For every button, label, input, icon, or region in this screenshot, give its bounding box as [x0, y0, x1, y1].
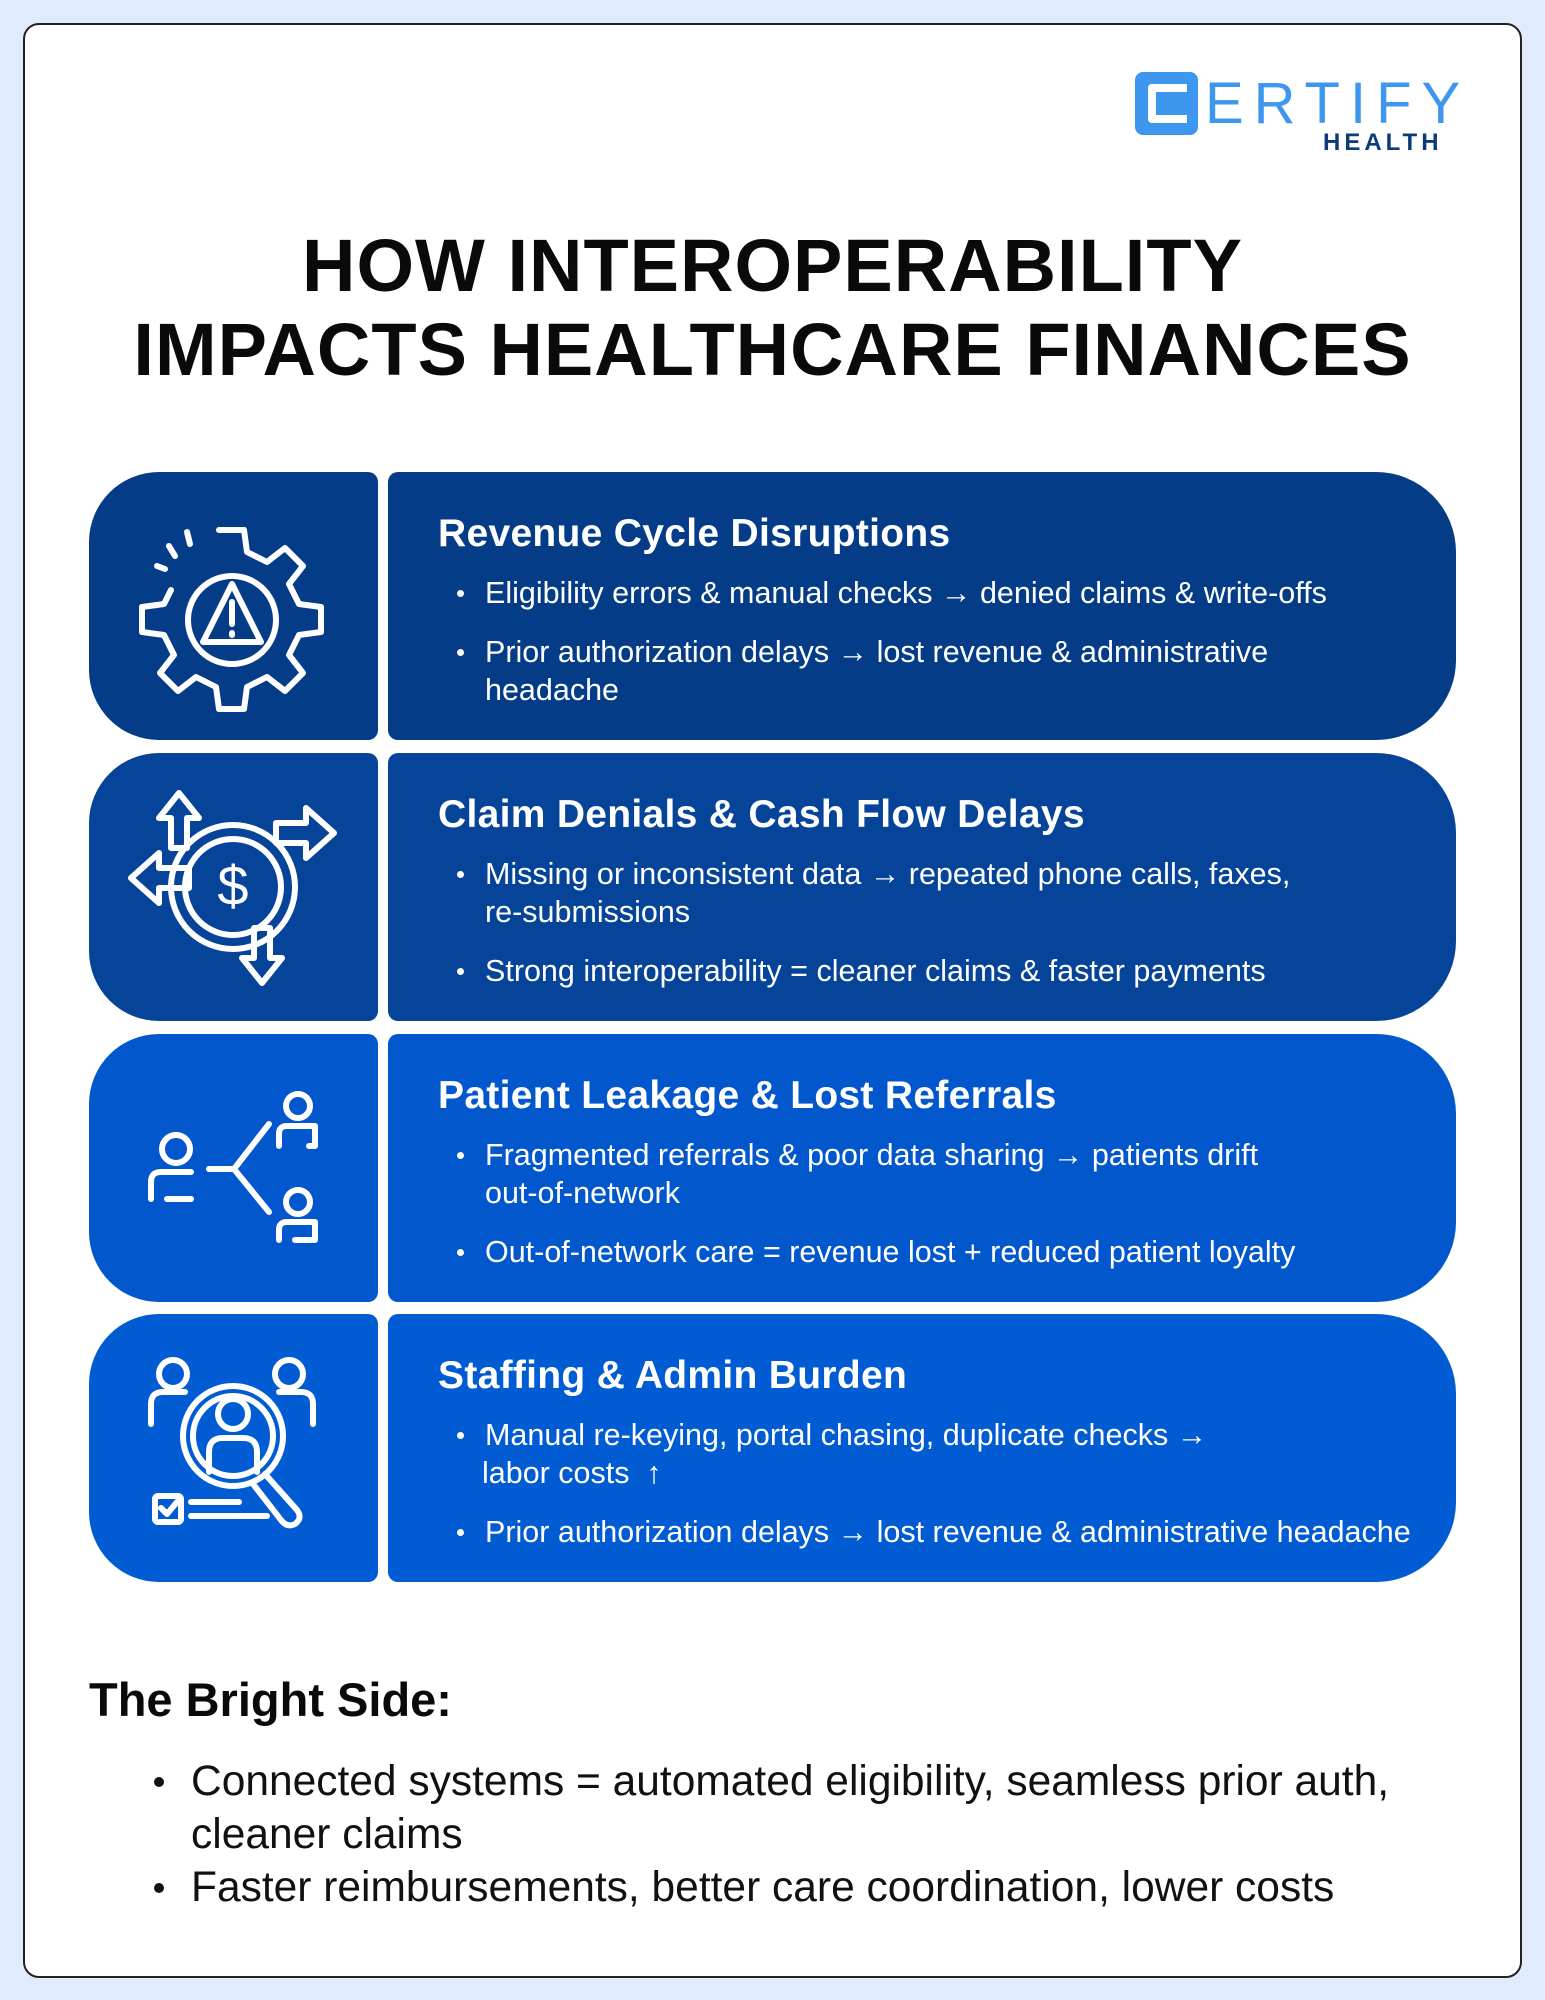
bright side bullets: cleaner claims: [191, 1811, 463, 1858]
row 1 text: Prior authorization delays → lost revenue & administrative: [485, 635, 1268, 669]
row 1 icon: gear warning: [89, 472, 378, 740]
bright side bullets: [154, 1758, 1389, 1911]
row 4 text: labor costs ↑: [482, 1456, 662, 1490]
logo: [1135, 71, 1470, 156]
row 2 text: Strong interoperability = cleaner claims & faster payments: [485, 954, 1266, 988]
row 4 text: [388, 1314, 1456, 1582]
row 2 text: re-submissions: [485, 895, 690, 929]
row 2 icon: dollar arrows: $: [217, 854, 249, 917]
row 3 icon: referral network: [89, 1034, 378, 1302]
logo: HEALTH: [1323, 129, 1443, 156]
row 4 text: Staffing & Admin Burden: [438, 1354, 907, 1397]
row 3 text: Out-of-network care = revenue lost + reduced patient loyalty: [485, 1235, 1295, 1269]
row 3 text: Patient Leakage & Lost Referrals: [438, 1074, 1057, 1117]
row 4 text: Manual re-keying, portal chasing, duplicate checks →: [485, 1418, 1207, 1452]
logo text: ERTIFY: [1205, 71, 1470, 136]
row 2 text: [388, 753, 1456, 1021]
bright side heading: The Bright Side:: [89, 1673, 452, 1726]
bright side bullets: Connected systems = automated eligibility, seamless prior auth,: [191, 1758, 1389, 1805]
row 1 text: [388, 472, 1456, 740]
row 2 text: Claim Denials & Cash Flow Delays: [438, 793, 1085, 836]
bright side bullets: Faster reimbursements, better care coordination, lower costs: [191, 1864, 1334, 1911]
row 3 text: [388, 1034, 1456, 1302]
row 3 text: Fragmented referrals & poor data sharing → patients drift: [485, 1138, 1258, 1172]
row 2 icon: dollar arrows: [89, 753, 378, 1021]
row 4 icon: search people: [89, 1314, 378, 1582]
row 1 text: Eligibility errors & manual checks → denied claims & write-offs: [485, 576, 1327, 610]
title: IMPACTS HEALTHCARE FINANCES: [133, 308, 1412, 391]
row 3 text: out-of-network: [485, 1176, 680, 1210]
logo mark C: [1135, 72, 1198, 135]
row 4 text: Prior authorization delays → lost revenue & administrative headache: [485, 1515, 1411, 1549]
row 2 text: Missing or inconsistent data → repeated phone calls, faxes,: [485, 857, 1290, 891]
title: HOW INTEROPERABILITY: [302, 224, 1243, 307]
title: [133, 224, 1412, 391]
row 1 text: headache: [485, 673, 619, 707]
row 1 text: Revenue Cycle Disruptions: [438, 512, 950, 555]
